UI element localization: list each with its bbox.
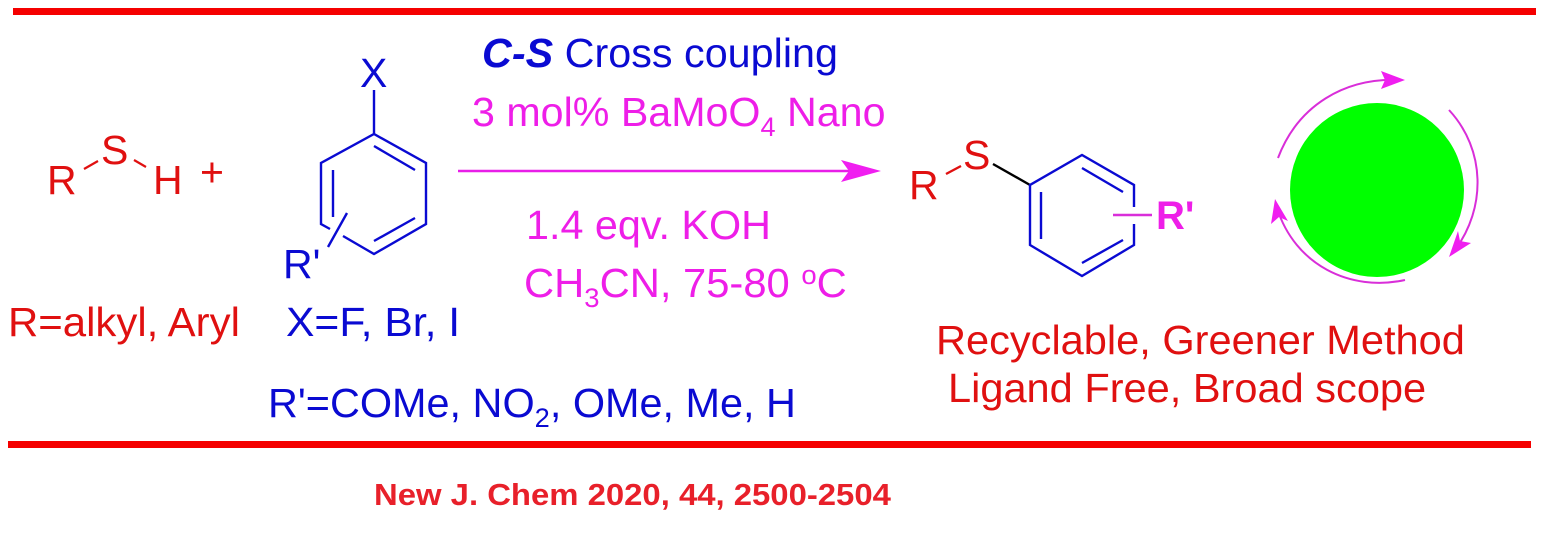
benefits text xyxy=(936,317,1465,411)
reagent: aryl halide xyxy=(283,50,426,287)
solvent and temperature: C xyxy=(817,260,847,306)
bottom red rule xyxy=(8,441,1531,448)
arrow: reaction xyxy=(458,160,881,182)
label: R' groups: R'=COMe, NO xyxy=(268,380,535,426)
benefits text: Recyclable, Greener Method xyxy=(936,317,1465,363)
solvent and temperature: o xyxy=(801,259,817,290)
benefits text: Ligand Free, Broad scope xyxy=(948,365,1426,411)
icon: recyclable green catalyst xyxy=(1271,71,1478,283)
solvent and temperature: 3 xyxy=(584,282,600,313)
catalyst: Nano xyxy=(776,89,886,135)
reagent: aryl halide: R' xyxy=(283,241,320,287)
label: R' groups: , OMe, Me, H xyxy=(550,380,796,426)
product: aryl sulfide: R' xyxy=(1156,194,1194,238)
catalyst: 3 mol% BaMoO xyxy=(472,89,760,135)
solvent and temperature: CH xyxy=(524,260,584,306)
catalyst: 4 xyxy=(760,112,776,142)
base: 1.4 eqv. KOH xyxy=(526,202,771,248)
heading: C-S cross coupling: C-S Cross coupling xyxy=(482,30,838,76)
reagent: thiol xyxy=(47,127,224,203)
label: X groups: X=F, Br, I xyxy=(286,299,460,345)
reagent: thiol: R xyxy=(47,157,77,203)
reagent: thiol: H xyxy=(153,157,183,203)
reagent: aryl halide: X xyxy=(360,50,387,96)
reagent: thiol: + xyxy=(200,149,224,195)
solvent and temperature: CN, 75-80 xyxy=(600,260,801,306)
product: aryl sulfide: R xyxy=(909,162,939,208)
top red rule xyxy=(13,8,1536,15)
reagent: thiol: S xyxy=(101,127,128,173)
product: aryl sulfide xyxy=(909,132,1194,276)
label: R' groups: 2 xyxy=(535,402,550,433)
label: R groups: R=alkyl, Aryl xyxy=(8,298,240,345)
citation: New J. Chem 2020, 44, 2500-2504 xyxy=(374,477,891,512)
product: aryl sulfide: S xyxy=(963,132,990,178)
